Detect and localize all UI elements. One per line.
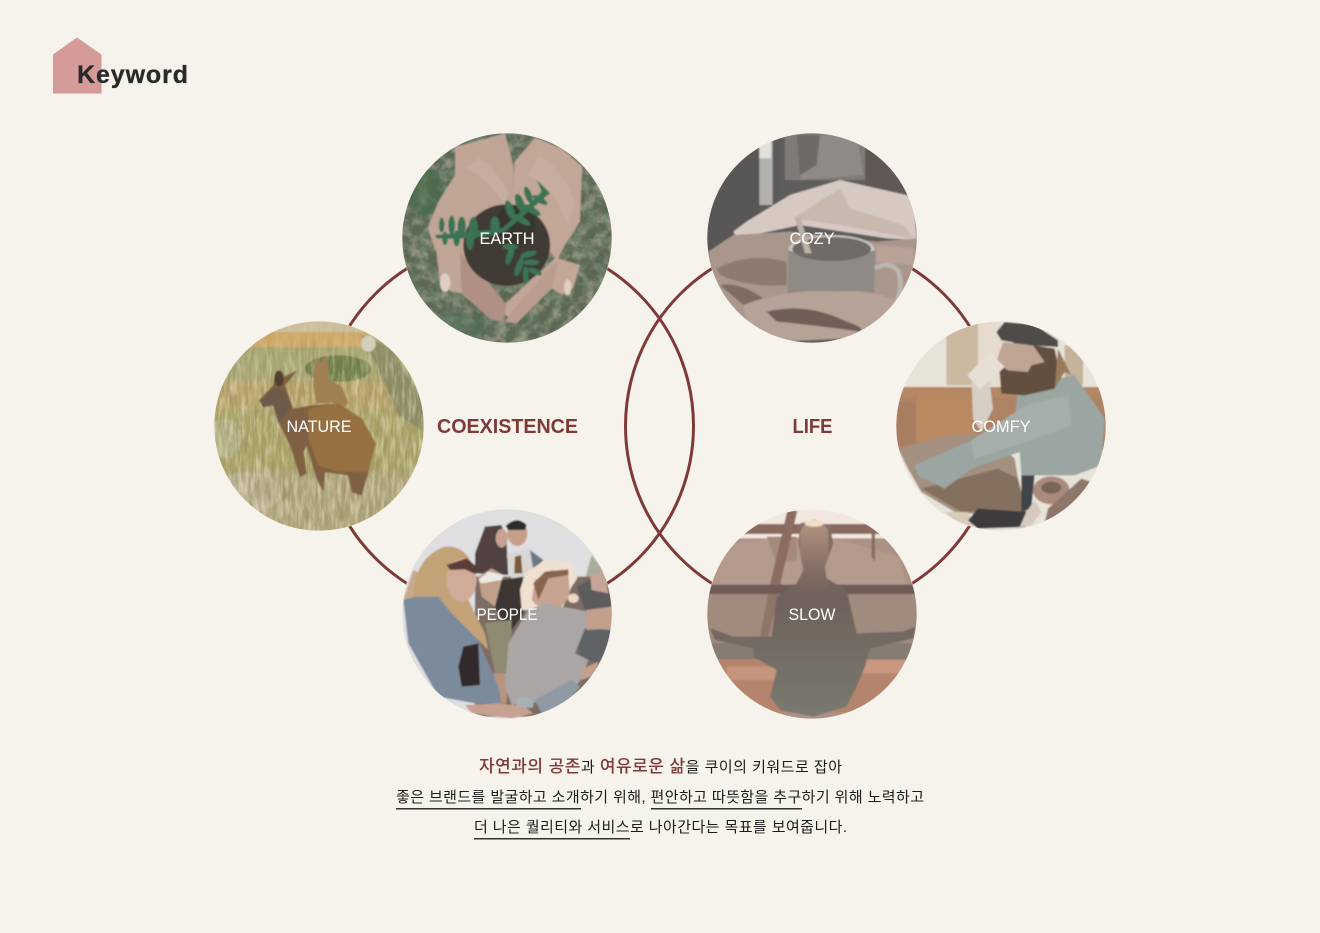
- right ring: life: [626, 240, 998, 612]
- photo label: NATURE: [286, 418, 352, 436]
- photo label: EARTH: [480, 230, 534, 248]
- logo: [53, 38, 188, 94]
- photo label: COMFY: [972, 418, 1030, 436]
- underline: brand: [396, 808, 581, 810]
- underline: quality: [474, 838, 630, 840]
- line 2: 좋은 브랜드를 발굴하고 소개하기 위해, 편안하고 따뜻함을 추구하기 위해 노력하고: [396, 789, 924, 806]
- photo circle: earth: [395, 125, 620, 350]
- photo circle: people: [395, 500, 620, 725]
- underline: comfort: [651, 808, 802, 810]
- icon: house: [53, 38, 102, 94]
- line 3: 더 나은 퀄리티와 서비스로 나아간다는 목표를 보여줍니다.: [474, 819, 847, 836]
- left ring: coexistence: [320, 240, 694, 612]
- photo circle: cozy: [700, 125, 925, 350]
- photo circle: slow: [707, 510, 917, 719]
- line 1: 자연과의 공존과 여유로운 삶을 쿠이의 키워드로 잡아: [479, 757, 842, 776]
- label: coexistence: COEXISTENCE: [437, 415, 578, 438]
- photo label: SLOW: [788, 606, 836, 624]
- photo circle: comfy: [888, 312, 1113, 537]
- photo label: PEOPLE: [476, 606, 538, 624]
- photo label: COZY: [790, 230, 834, 248]
- label: life: LIFE: [792, 415, 832, 438]
- description text: [396, 757, 924, 840]
- logo wordmark: Keyword: [77, 61, 188, 89]
- photo circle: nature: [205, 312, 430, 537]
